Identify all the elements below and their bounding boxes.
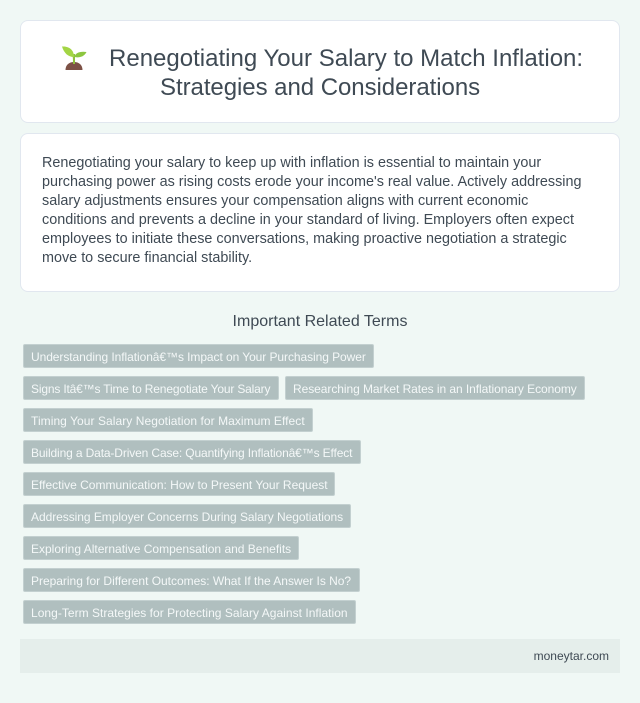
tag [23, 568, 360, 592]
tag list [23, 344, 585, 624]
tag: Addressing Employer Concerns During Salary Negotiations [31, 510, 343, 524]
panel: intro paragraph [20, 133, 620, 292]
tag [23, 440, 361, 464]
tag: Timing Your Salary Negotiation for Maximum Effect [31, 414, 305, 428]
tag: Effective Communication: How to Present Your Request [31, 478, 328, 492]
text block: intro: move to secure financial stability. [42, 250, 252, 266]
tag: Preparing for Different Outcomes: What If the Answer Is No? [31, 574, 351, 588]
panel: title card [20, 20, 620, 123]
title: Strategies and Considerations [160, 74, 480, 101]
text block: intro: purchasing power as rising costs erode your income's real value. Actively addressing [42, 174, 581, 190]
tag: Exploring Alternative Compensation and Benefits [31, 542, 291, 556]
tag: Long-Term Strategies for Protecting Salary Against Inflation [31, 606, 348, 620]
tag [23, 376, 279, 400]
title [109, 45, 583, 101]
tag: Researching Market Rates in an Inflationary Economy [293, 382, 577, 396]
title: Renegotiating Your Salary to Match Inflation: [109, 45, 583, 72]
tag: Signs Itâ€™s Time to Renegotiate Your Salary [31, 382, 270, 396]
tag [285, 376, 585, 400]
tag [23, 344, 374, 368]
footer text: moneytar.com [534, 649, 609, 663]
tag [23, 472, 335, 496]
text block: intro: employees to initiate these conversations, making proactive negotiation a strategic [42, 231, 567, 247]
text block: intro: conditions and prevents a decline in your standard of living. Employers often expect [42, 212, 574, 228]
text block: intro [42, 155, 581, 266]
tag [23, 504, 351, 528]
heading: related terms: Important Related Terms [233, 313, 407, 330]
tag [23, 408, 313, 432]
tag: Building a Data-Driven Case: Quantifying Inflationâ€™s Effect [31, 446, 352, 460]
tag [23, 600, 356, 624]
text block: intro: salary adjustments ensures your compensation aligns with current economic [42, 193, 528, 209]
tag: Understanding Inflationâ€™s Impact on Your Purchasing Power [31, 350, 366, 364]
text block: intro: Renegotiating your salary to keep up with inflation is essential to maintain your [42, 155, 541, 171]
icon: seedling [62, 46, 86, 70]
tag [23, 536, 299, 560]
footer bar [20, 639, 620, 673]
